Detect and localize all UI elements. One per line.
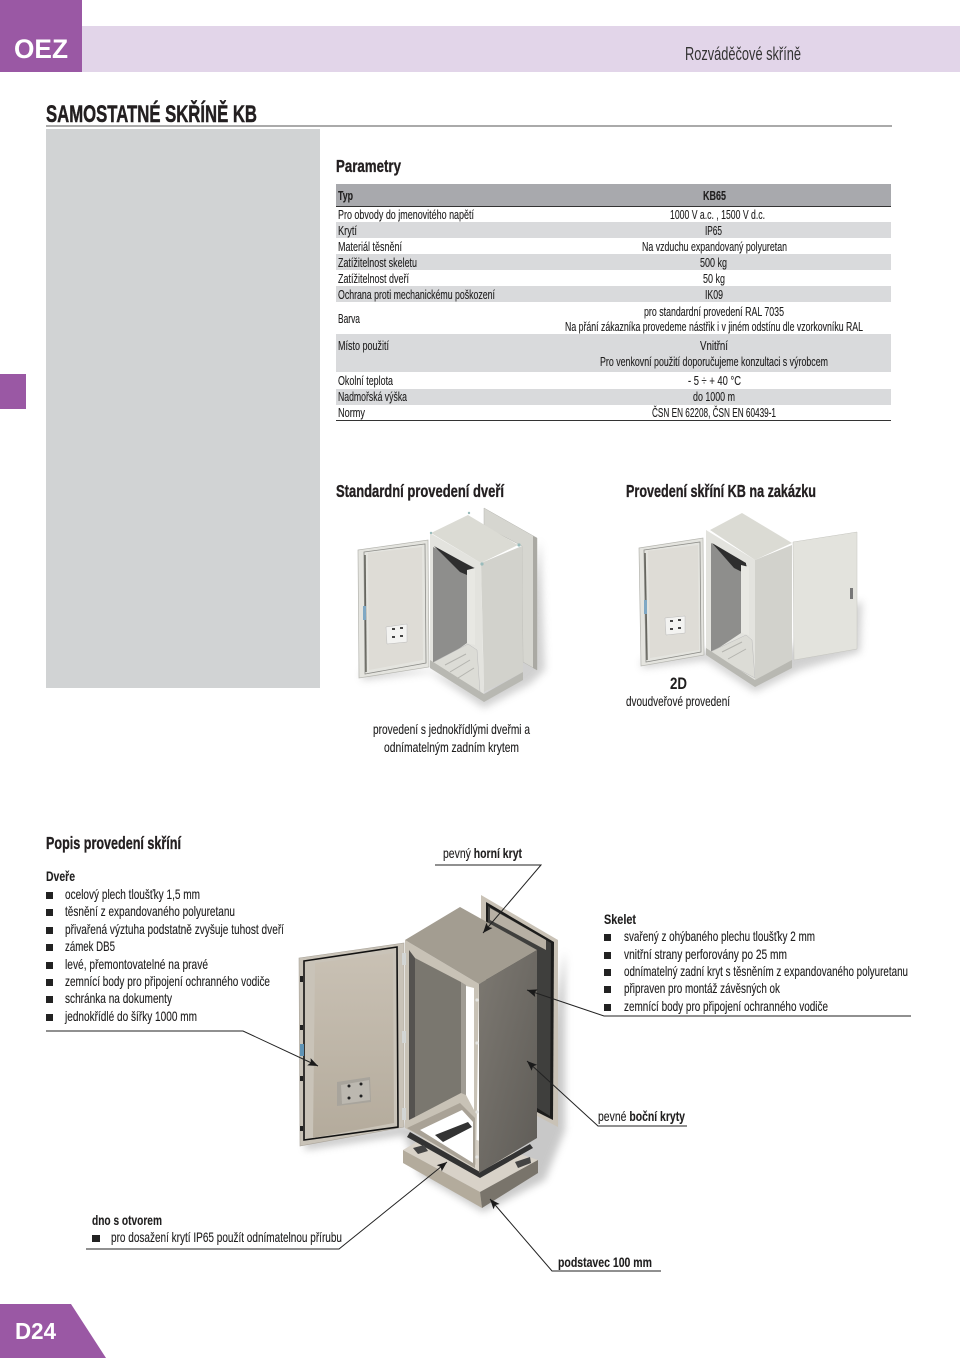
row: temperature (338, 373, 741, 388)
row: altitude: do 1000 m (693, 389, 735, 404)
caption: 2D version: dvoudveřové provedení (626, 693, 730, 709)
row: voltage: 1000 V a.c. , 1500 V d.c. (670, 207, 765, 222)
list title: frame: Skelet (604, 911, 636, 927)
row: mechanical protection: IK09 (705, 287, 723, 302)
frame bolts (475, 998, 479, 1159)
row: colour (338, 304, 863, 334)
list: doors (46, 868, 284, 1024)
row: seal material: Na vzduchu expandovaný polyuretan (642, 239, 787, 254)
row: seal material (338, 239, 787, 254)
parameters table (336, 184, 891, 421)
item: steel sheet: ocelový plech tloušťky 1,5 mm (65, 886, 200, 902)
illustration: double-door cabinet (639, 513, 862, 692)
page number badge: D24 (15, 1318, 56, 1344)
item: reversible (46, 956, 208, 972)
caption: single-door version: provedení s jednokřídlými dveřmi a (373, 721, 530, 737)
row: colour: Barva (338, 311, 360, 326)
item: welded frame (604, 928, 815, 944)
logo: OEZ (0, 0, 82, 72)
row: type header: Typ (338, 188, 353, 203)
grey image panel (46, 129, 320, 688)
heading: description of cabinet versions: Popis provedení skříní (46, 833, 182, 853)
item: single door width (46, 1008, 197, 1024)
callout: top cover (435, 845, 541, 933)
back panel (481, 895, 558, 1127)
base plinth (403, 1128, 538, 1208)
callout: side covers: pevné boční kryty (598, 1108, 685, 1124)
item: welded frame: svařený z ohýbaného plechu tloušťky 2 mm (624, 928, 815, 944)
item: earthing (46, 973, 270, 989)
item: earthing (604, 998, 828, 1014)
row: door load: 50 kg (703, 271, 725, 286)
logo: OEZ: OEZ (14, 34, 68, 64)
row: type header: KB65 (703, 188, 726, 203)
row: type header (336, 184, 891, 207)
item: earthing: zemnící body pro připojení ochranného vodiče (624, 998, 828, 1014)
cabinet top (405, 907, 537, 984)
page title: SAMOSTATNÉ SKŘÍNĚ KB (46, 100, 257, 128)
row: altitude (336, 389, 891, 405)
row: voltage (338, 207, 765, 222)
caption: 2D version (626, 674, 730, 709)
header title: Rozváděčové skříně (685, 44, 801, 64)
list: frame (604, 911, 908, 1014)
row: altitude: Nadmořská výška (338, 389, 408, 404)
row: frame load: Zatížitelnost skeletu (338, 255, 417, 270)
cabinet side (479, 950, 537, 1173)
row: protection: IP65 (705, 223, 722, 238)
row: voltage: Pro obvody do jmenovitého napětí (338, 207, 474, 222)
item: hanging lugs: připraven pro montáž závěsných ok (624, 980, 781, 996)
item: seal: těsnění z expandovaného polyuretanu (65, 903, 235, 919)
row: temperature: Okolní teplota (338, 373, 394, 388)
callout: bottom with opening (86, 1162, 447, 1249)
heading: custom version: Provedení skříní KB na zakázku (626, 481, 816, 501)
row: seal material: Materiál těsnění (338, 239, 402, 254)
row: protection (336, 222, 891, 238)
item: reinforcement (46, 921, 284, 937)
header band (0, 0, 960, 72)
callout: bottom with opening: pro dosažení krytí IP65 použít odnímatelnou přírubu (111, 1229, 342, 1245)
callout: bottom with opening: dno s otvorem (92, 1212, 162, 1228)
illustration: exploded cabinet (299, 895, 565, 1212)
side tab (0, 374, 26, 409)
item: single door width: jednokřídlé do šířky 1000 mm (64, 1008, 197, 1024)
row: door load (338, 271, 725, 286)
callout: side covers (527, 1061, 687, 1126)
row: protection: Krytí (338, 223, 357, 238)
row: mechanical protection: Ochrana proti mechanickému poškození (338, 287, 495, 302)
callout: top cover: pevný horní kryt (443, 845, 522, 861)
item: seal (46, 903, 235, 919)
open door (299, 943, 404, 1146)
item: lock (46, 938, 115, 954)
item: perforation: vnitřní strany perforovány po 25 mm (624, 946, 787, 962)
row: colour: pro standardní provedení RAL 7035 (644, 304, 784, 319)
page number badge (0, 1304, 106, 1358)
row: frame load (336, 254, 891, 270)
row: place of use: Místo použití (338, 338, 389, 353)
cabinet front and interior (402, 940, 479, 1168)
item: reversible: levé, přemontovatelné na pravé (65, 956, 208, 972)
caption: 2D version: 2D (670, 674, 687, 693)
callout: plinth: podstavec 100 mm (558, 1254, 652, 1270)
row: mechanical protection (336, 286, 891, 302)
caption: single-door version: odnímatelným zadním krytem (384, 739, 519, 755)
row: door load: Zatížitelnost dveří (338, 271, 409, 286)
row: standards: Normy (338, 405, 365, 420)
item: reinforcement: přivařená výztuha podstatně zvyšuje tuhost dveří (65, 921, 284, 937)
item: hanging lugs (604, 980, 781, 996)
item: document box: schránka na dokumenty (65, 990, 172, 1006)
item: steel sheet (46, 886, 200, 902)
item: lock: zámek DB5 (65, 938, 115, 954)
item: earthing: zemnící body pro připojení ochranného vodiče (65, 973, 270, 989)
row: standards (336, 405, 891, 421)
item: perforation (604, 946, 787, 962)
heading: standard door version: Standardní provedení dveří (336, 481, 505, 501)
list title: doors: Dveře (46, 868, 75, 884)
illustration: single-door cabinet with removable back panel (358, 508, 545, 708)
arrow: doors leader (46, 1031, 318, 1066)
row: temperature: - 5 ÷ + 40 °C (688, 373, 741, 388)
callout: plinth (490, 1199, 661, 1271)
heading: Parametry: Parametry (336, 156, 401, 176)
row: place of use: Vnitřní (700, 338, 728, 353)
row: frame load: 500 kg (700, 255, 727, 270)
row: place of use (336, 334, 891, 372)
item: document box (46, 990, 172, 1006)
row: standards: ČSN EN 62208, ČSN EN 60439-1 (652, 405, 776, 420)
arrow: frame leader (527, 990, 911, 1016)
row: place of use: Pro venkovní použití doporučujeme konzultaci s výrobcem (600, 354, 828, 369)
caption: single-door version (373, 721, 530, 755)
